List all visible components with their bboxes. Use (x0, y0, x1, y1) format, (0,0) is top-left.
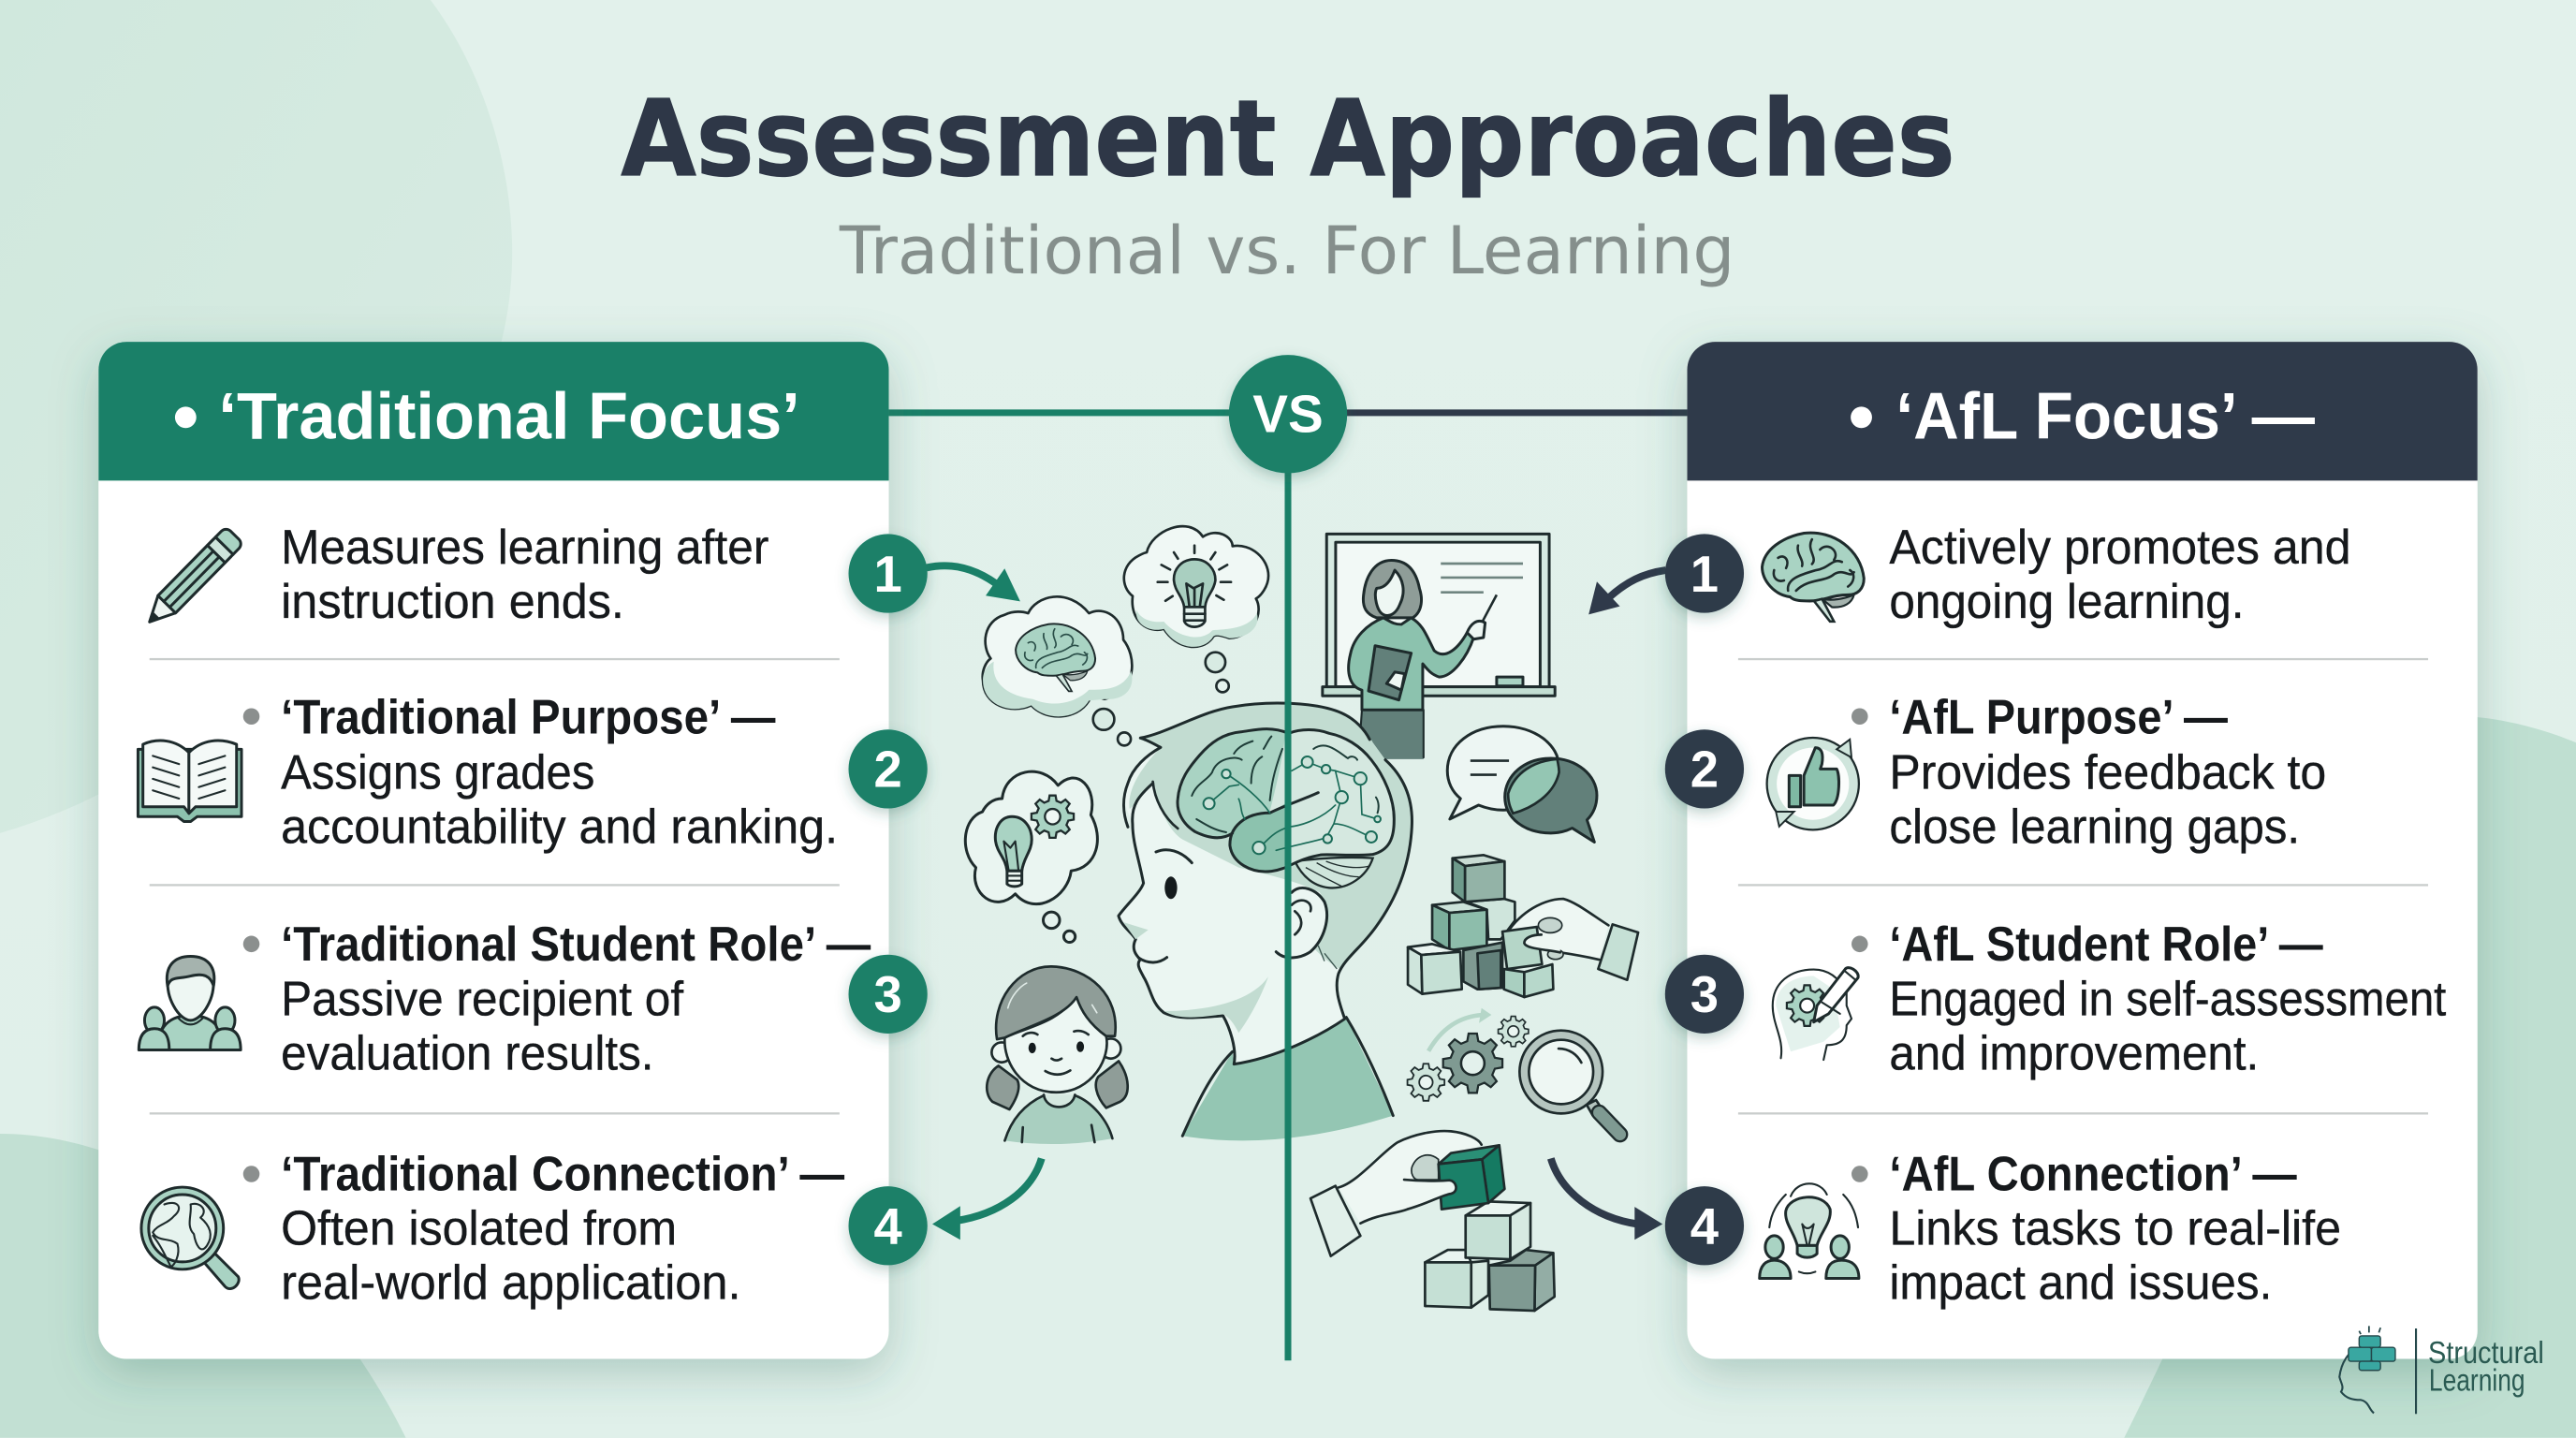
center divider line (1284, 460, 1292, 1360)
bottom-left cube (1408, 944, 1462, 994)
row 2 text: AfL purpose: ‘AfL Purpose’ — (1889, 690, 2228, 744)
row 1 text: AfL: ongoing learning. (1889, 574, 2244, 628)
connector: left header to VS (884, 409, 1232, 416)
connector: VS to right header (1344, 409, 1692, 416)
main student head with brain (1119, 703, 1412, 1140)
hand holding card (1502, 899, 1638, 980)
row 3 text: traditional student role: ‘Traditional Student Role’ — (281, 917, 871, 971)
row 3 text: traditional student role: Passive recipient of (281, 972, 684, 1026)
small gear right (1499, 1017, 1529, 1047)
number badge left 1 (849, 534, 928, 613)
panel header: AfL: ‘AfL Focus’ — (1895, 379, 2316, 453)
row 2 text: AfL purpose: close learning gaps. (1889, 799, 2300, 853)
number badge left 4 (849, 1186, 928, 1265)
skin and hair silhouette (1119, 703, 1412, 1064)
row 4 text: AfL connection: Links tasks to real-life (1889, 1200, 2341, 1255)
number badge left 1: 1 (874, 546, 902, 603)
row 1 text: traditional (281, 520, 768, 628)
rotation arrow (1428, 1015, 1482, 1051)
sweater (1182, 1018, 1393, 1140)
icon: thumbs up feedback loop (1767, 738, 1859, 829)
row 1 text: AfL: Actively promotes and (1889, 520, 2351, 574)
panel header: traditional: ‘Traditional Focus’ (218, 379, 800, 453)
row 2 text: AfL purpose (1852, 690, 2326, 853)
icon: student group (139, 956, 241, 1050)
number badge left 3 (849, 955, 928, 1034)
title: Assessment Approaches (621, 79, 1955, 200)
row 4 text: traditional connection: real-world application. (281, 1255, 741, 1309)
mouth (1139, 958, 1167, 962)
row 1 text: AfL (1889, 520, 2351, 628)
panel header: traditional (98, 342, 889, 480)
speech bubbles (1447, 726, 1597, 842)
row 3 text: AfL student role (1852, 917, 2446, 1080)
thought cloud: bulb (1124, 526, 1268, 692)
brain folds (1192, 737, 1379, 832)
row 2 text: traditional purpose: Assigns grades (281, 744, 594, 799)
icon: head with gear and pencil (1773, 968, 1858, 1060)
eye (1164, 876, 1178, 899)
row 3 text: AfL student role: Engaged in self-assessment (1889, 972, 2446, 1026)
arrow: item 4 left (932, 1158, 1042, 1240)
circuit lines (1209, 762, 1378, 850)
row 3 text: traditional student role (243, 917, 871, 1080)
badge: VS (1229, 355, 1347, 473)
head outlines (1119, 703, 1412, 1064)
row 1 text: traditional: instruction ends. (281, 574, 624, 628)
icon: open book (138, 741, 242, 822)
thought clouds: brain and bulb (983, 526, 1268, 745)
panel header: AfL (1687, 342, 2478, 480)
row 1 text: traditional: Measures learning after (281, 520, 768, 574)
row 3 text: AfL student role: ‘AfL Student Role’ — (1889, 917, 2323, 971)
row 2 text: AfL purpose: Provides feedback to (1889, 744, 2326, 799)
bottom-right cube (1504, 964, 1553, 997)
upper stacked cube (1466, 1201, 1530, 1259)
girl student (987, 966, 1128, 1144)
thought cloud: bulb and gear (965, 771, 1097, 943)
top cube (1453, 855, 1504, 902)
dark middle cube (1463, 943, 1502, 990)
panel: traditional focus (98, 342, 889, 1358)
arrow: item 1 right (1588, 570, 1666, 614)
central illustration (927, 526, 1666, 1311)
magnifier (1519, 1031, 1620, 1135)
teacher at whiteboard (1323, 534, 1555, 759)
temporal lobe tone (1230, 800, 1290, 872)
eyebrow (1156, 850, 1192, 863)
circuit nodes (1204, 756, 1381, 854)
row 4 text: traditional connection (243, 1147, 844, 1309)
row 4 text: AfL connection (1852, 1147, 2341, 1309)
arrow: item 4 right (1551, 1158, 1662, 1240)
number badge left 2: 2 (874, 741, 902, 799)
blocks, gears and magnifier (1310, 855, 1638, 1311)
row 3 text: traditional student role: evaluation results. (281, 1026, 654, 1080)
number badge right 3 (1665, 955, 1744, 1034)
cerebellum (1295, 858, 1373, 888)
white back cube (1467, 899, 1515, 939)
subtitle: Traditional vs. For Learning (839, 213, 1734, 289)
logo: Structural Learning: Learning (2429, 1364, 2525, 1399)
number badge right 4: 4 (1690, 1198, 1719, 1255)
row 2 text: traditional purpose: ‘Traditional Purpose’ — (281, 690, 776, 744)
row 4 text: traditional connection: Often isolated from (281, 1200, 677, 1255)
large gear (1443, 1034, 1502, 1093)
icon: globe under magnifier (141, 1187, 239, 1289)
icon: pencil (140, 526, 243, 631)
row 4 text: AfL connection: impact and issues. (1889, 1255, 2272, 1309)
icon: idea bulb with two people (1760, 1183, 1859, 1278)
number badge right 3: 3 (1690, 966, 1719, 1023)
number badge left 3: 3 (874, 966, 902, 1023)
number badge right 4 (1665, 1186, 1744, 1265)
hand holding green cube (1310, 1131, 1504, 1256)
brain outer (1178, 729, 1394, 873)
lower-left cube (1425, 1250, 1488, 1308)
lower-right cube (1489, 1250, 1555, 1311)
row 4 text: traditional connection: ‘Traditional Connection’ — (281, 1147, 844, 1201)
middle-left cube (1432, 902, 1486, 950)
thought cloud: brain (983, 596, 1132, 745)
row 2 text: traditional purpose (243, 690, 838, 853)
number badge right 1: 1 (1690, 546, 1719, 603)
row 2 text: traditional purpose: accountability and ranking. (281, 799, 838, 853)
badge: VS: VS (1252, 385, 1324, 444)
logo: Structural Learning (2339, 1326, 2544, 1414)
brain outline (1178, 729, 1394, 872)
left lobe tone (1179, 730, 1285, 836)
panel: AfL focus (1687, 342, 2478, 1358)
row 4 text: AfL connection: ‘AfL Connection’ — (1889, 1147, 2297, 1201)
logo: Structural Learning: Structural (2428, 1336, 2544, 1371)
number badge left 4: 4 (874, 1198, 902, 1255)
row 3 text: AfL student role: and improvement. (1889, 1026, 2259, 1080)
number badge right 2 (1665, 729, 1744, 809)
small gear left (1408, 1064, 1444, 1101)
nose and chin shadows (1123, 922, 1149, 939)
arrow: item 1 left (927, 565, 1020, 601)
number badge left 2 (849, 729, 928, 809)
number badge right 1 (1665, 534, 1744, 613)
ear (1276, 888, 1327, 958)
number badge right 2: 2 (1690, 741, 1719, 799)
icon: brain (1763, 533, 1864, 622)
hair tone (1129, 703, 1412, 969)
